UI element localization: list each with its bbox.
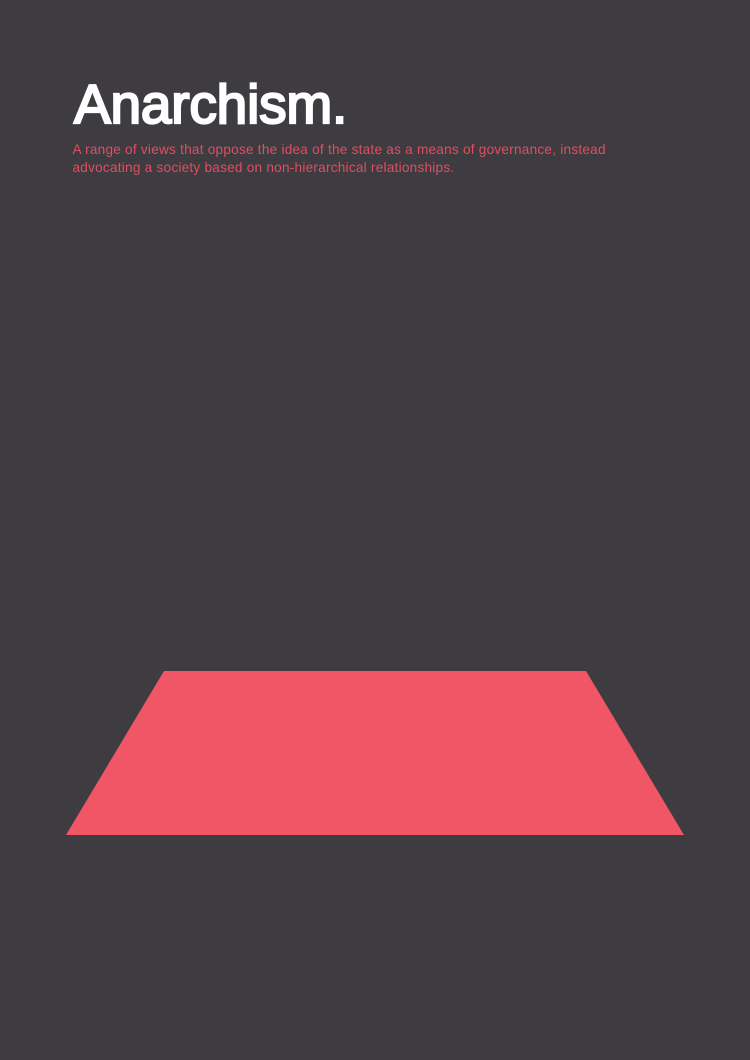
description text: advocating a society based on non-hierarchical relationships. [72,160,454,175]
title: Anarchism. [74,73,347,135]
description text: A range of views that oppose the idea of the state as a means of governance, instead [72,142,606,157]
description text [72,142,606,175]
